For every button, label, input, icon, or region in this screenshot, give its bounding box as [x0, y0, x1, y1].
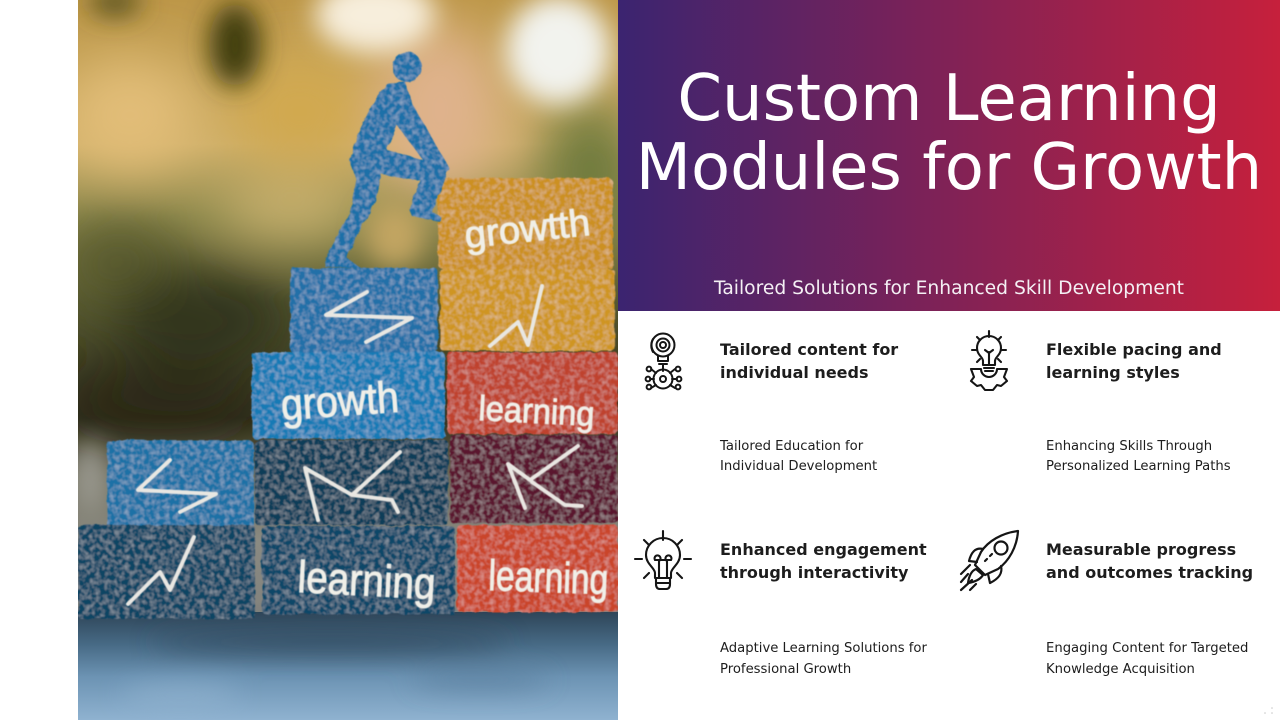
- item 4 heading: and outcomes tracking: [1046, 563, 1253, 582]
- chalk writing: growth: [279, 373, 400, 430]
- item 1 heading: Tailored content for: [720, 340, 898, 359]
- item 1 text: [720, 439, 877, 474]
- header band: [618, 0, 1280, 311]
- chalk writing: learning: [296, 551, 437, 609]
- item 1 heading: individual needs: [720, 363, 868, 382]
- title: Modules for Growth: [636, 131, 1262, 205]
- chalk writing: growtth: [463, 202, 592, 257]
- icon: light bulb: [634, 530, 692, 590]
- item 2 text: [1046, 439, 1231, 474]
- item 4 text: [1046, 641, 1248, 677]
- item 1 text: Individual Development: [720, 459, 877, 474]
- item 2 heading: Flexible pacing and: [1046, 340, 1222, 359]
- item 3 text: [720, 641, 927, 677]
- chalk writing: learning: [478, 389, 595, 434]
- item 2 text: Personalized Learning Paths: [1046, 459, 1231, 474]
- climbing figure: [325, 52, 449, 269]
- item 4 text: Engaging Content for Targeted: [1046, 641, 1248, 656]
- item 1 heading: [720, 340, 898, 382]
- bricks: [78, 178, 618, 619]
- subtitle: Tailored Solutions for Enhanced Skill Development: [714, 278, 1184, 299]
- item 1 text: Tailored Education for: [720, 439, 863, 454]
- chalk writing: [279, 202, 609, 609]
- item 4 heading: Measurable progress: [1046, 540, 1236, 559]
- item 2 text: Enhancing Skills Through: [1046, 439, 1212, 454]
- photo: chalk bricks and climbing figure: [78, 0, 674, 720]
- item 4 text: Knowledge Acquisition: [1046, 662, 1195, 677]
- item 3 text: Professional Growth: [720, 662, 851, 677]
- icon: gear bulb with network: [644, 332, 682, 390]
- item 3 heading: through interactivity: [720, 563, 908, 582]
- icon: bulb over gear: [970, 330, 1008, 391]
- item 3 heading: [720, 540, 927, 582]
- item 3 text: Adaptive Learning Solutions for: [720, 641, 927, 656]
- title: Custom Learning: [677, 62, 1221, 136]
- item 4 heading: [1046, 540, 1253, 582]
- item 2 heading: learning styles: [1046, 363, 1180, 382]
- title: [636, 62, 1262, 205]
- item 3 heading: Enhanced engagement: [720, 540, 927, 559]
- icon: rocket: [960, 530, 1020, 592]
- item 2 heading: [1046, 340, 1222, 382]
- ground: [78, 612, 618, 720]
